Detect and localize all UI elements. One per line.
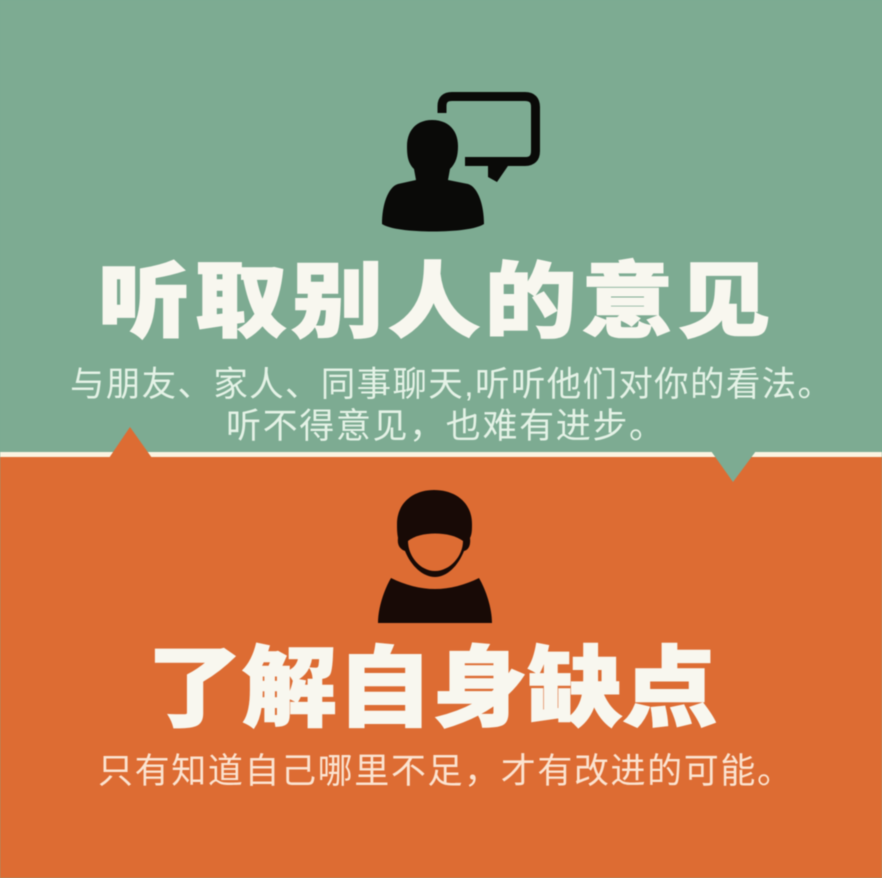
icon: person with speech bubble bbox=[382, 96, 536, 232]
panel: orange bottom section bbox=[0, 456, 882, 878]
heading: know your shortcomings: 了解自身缺点 bbox=[147, 640, 717, 738]
cream divider line bbox=[0, 452, 882, 457]
arrow: orange triangle pointing up bbox=[109, 427, 152, 458]
text block: listen description line 1: 与朋友、家人、同事聊天,听听他们对你的看法。 bbox=[70, 366, 832, 404]
text block: shortcomings description: 只有知道自己哪里不足，才有改进的可能。 bbox=[98, 752, 792, 791]
text block: listen description line 2: 听不得意见，也难有进步。 bbox=[226, 407, 664, 446]
icon: person with hair bbox=[378, 490, 492, 623]
heading: listen to others: 听取别人的意见 bbox=[98, 257, 770, 348]
arrow: green triangle pointing down bbox=[711, 451, 756, 482]
panel: green top section bbox=[0, 0, 882, 453]
